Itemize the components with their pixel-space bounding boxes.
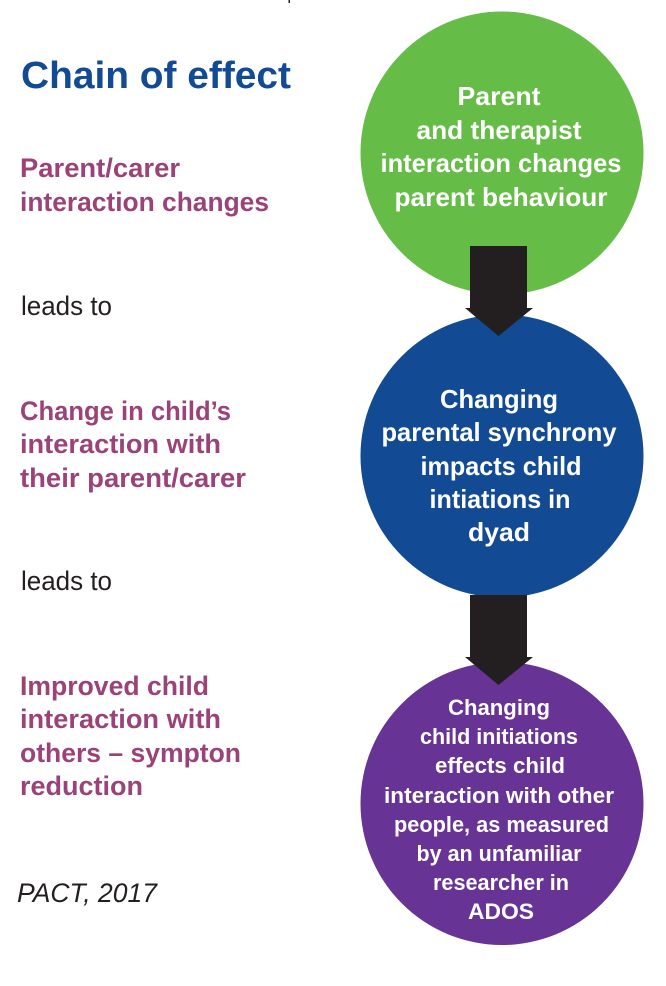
text: improved child interaction bbox=[20, 671, 241, 801]
circle: blue parental synchrony bbox=[360, 314, 644, 598]
circle: purple child initiations: Changing bbox=[448, 695, 550, 720]
text: improved child interaction: Improved child bbox=[20, 671, 209, 701]
arrow: green to blue bbox=[465, 246, 533, 336]
text: leads to: leads to bbox=[21, 566, 112, 596]
text: parent/carer interaction changes: interaction changes bbox=[20, 187, 269, 217]
text: change in child's interaction: interaction with bbox=[20, 429, 221, 459]
circle: blue parental synchrony: intiations in bbox=[430, 484, 570, 514]
citation: PACT, 2017 bbox=[17, 878, 158, 908]
text: change in child's interaction bbox=[20, 396, 246, 493]
circle: purple child initiations: ADOS bbox=[468, 899, 534, 924]
circle: purple child initiations: interaction with other bbox=[384, 783, 614, 808]
circle: purple child initiations: people, as measured bbox=[394, 812, 609, 837]
circle: blue parental synchrony: impacts child bbox=[420, 451, 582, 481]
text: improved child interaction: others – sympton bbox=[20, 738, 241, 768]
circle: green parent and therapist bbox=[360, 12, 644, 294]
arrow: blue to purple bbox=[465, 595, 533, 685]
text: improved child interaction: reduction bbox=[20, 771, 143, 801]
text: leads to: leads to bbox=[21, 291, 112, 321]
circle: green parent and therapist: interaction changes bbox=[380, 148, 622, 178]
circle: purple child initiations: researcher in bbox=[433, 870, 569, 895]
text: change in child's interaction: their parent/carer bbox=[20, 463, 246, 493]
text: improved child interaction: interaction with bbox=[20, 704, 221, 734]
text: parent/carer interaction changes: Parent/carer bbox=[20, 153, 180, 183]
circle: purple child initiations: by an unfamiliar bbox=[416, 841, 582, 866]
circle: purple child initiations bbox=[360, 662, 644, 945]
circle: blue parental synchrony: parental synchrony bbox=[382, 417, 617, 447]
circle: green parent and therapist: and therapist bbox=[416, 115, 582, 145]
circle: blue parental synchrony: dyad bbox=[468, 517, 530, 547]
circle: green parent and therapist: Parent bbox=[458, 81, 541, 111]
circle: purple child initiations: child initiations bbox=[420, 724, 578, 749]
title: Chain of effect bbox=[21, 55, 291, 97]
circle: green parent and therapist: parent behaviour bbox=[394, 182, 608, 212]
text: change in child's interaction: Change in child’s bbox=[20, 396, 231, 426]
text: parent/carer interaction changes bbox=[20, 153, 269, 217]
circle: purple child initiations: effects child bbox=[435, 753, 565, 778]
circle: blue parental synchrony: Changing bbox=[440, 384, 558, 414]
